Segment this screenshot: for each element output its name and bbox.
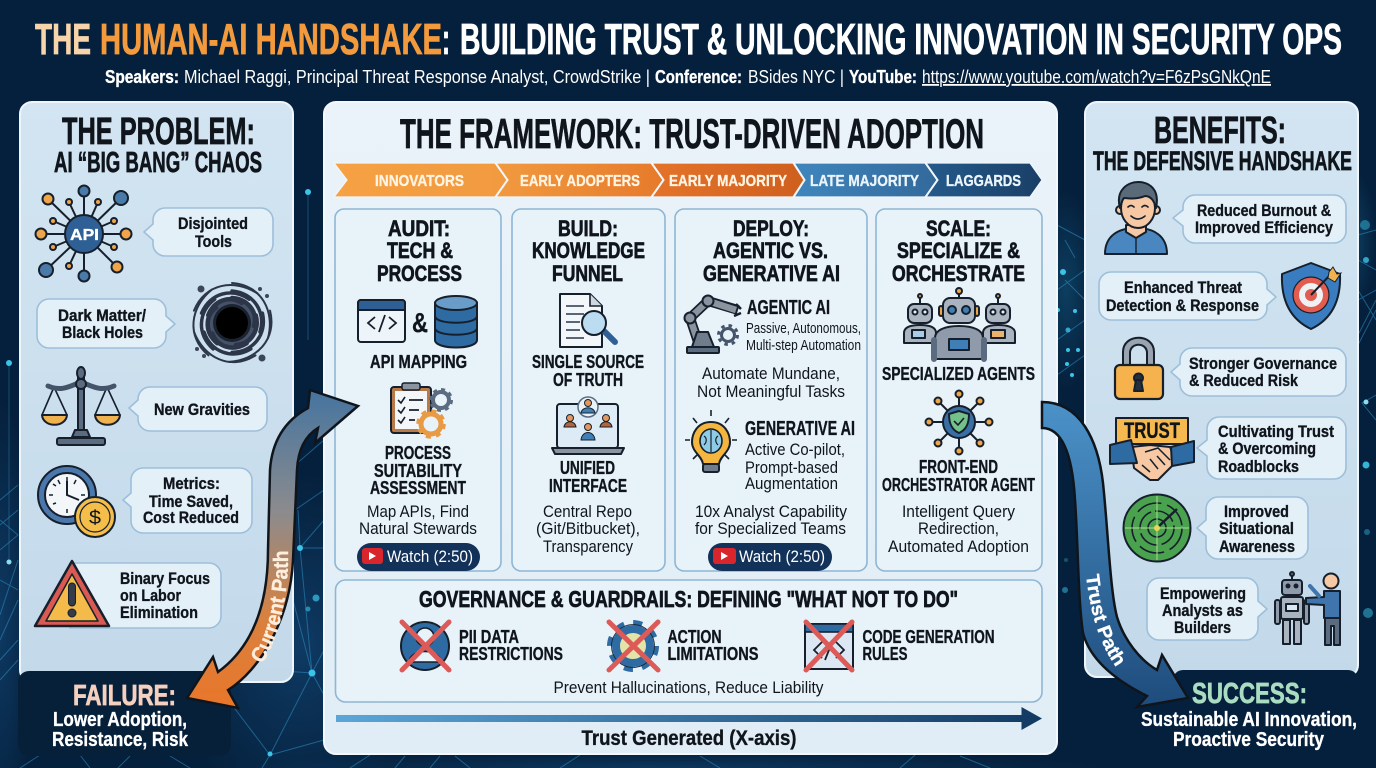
block: agentic AI: AGENTIC AI [747, 297, 830, 319]
heading: build: FUNNEL [552, 261, 623, 286]
text: audit summary [359, 502, 477, 538]
callout: cultivating trust: Cultivating Trust [1218, 422, 1334, 441]
callout: metrics [123, 468, 252, 533]
callout: threat detection: Enhanced Threat [1124, 278, 1242, 297]
callout: reduced burnout [1173, 195, 1346, 243]
heading: the framework: THE FRAMEWORK: TRUST-DRIVEN ADOPTION [400, 110, 984, 157]
label: PII data restrictions: RESTRICTIONS [459, 644, 563, 664]
text: scale summary: Redirection, [918, 519, 999, 538]
button: watch video [708, 543, 832, 571]
icon: clock and coin: $ [89, 508, 101, 529]
block: generative AI: 10x Analyst Capability [695, 502, 847, 521]
callout: situational awareness: Improved [1224, 502, 1289, 521]
panel: governance and guardrails [336, 580, 1042, 702]
callout: reduced burnout: Improved Efficiency [1195, 218, 1333, 237]
block: generative AI: Augmentation [745, 474, 838, 493]
text: build summary [536, 502, 640, 556]
block: agentic AI: Passive, Autonomous, [746, 320, 861, 337]
callout: cultivating trust: Roadblocks [1218, 457, 1299, 476]
icon: clock and coin [38, 466, 115, 537]
callout: metrics: Metrics: [163, 474, 220, 493]
panel: the framework [324, 102, 1057, 754]
button: watch video: Watch (2:50) [387, 547, 473, 566]
icon: document and magnifier [560, 294, 615, 347]
icon: code generation blocked [805, 622, 853, 670]
label: front-end orchestrator agent: ORCHESTRATOR AGENT [882, 475, 1035, 495]
heading: audit: PROCESS [377, 261, 462, 286]
heading: scale: SCALE: [926, 216, 991, 241]
heading: build: BUILD: [558, 216, 618, 241]
heading: audit: AUDIT: [388, 216, 450, 241]
label: code generation rules [862, 627, 994, 664]
heading: scale [892, 216, 1025, 286]
adoption curve chevrons: LATE MAJORITY [810, 173, 919, 190]
adoption curve chevrons [334, 163, 1042, 197]
label: process suitability assessment [370, 443, 466, 498]
callout: empowering analysts: Builders [1174, 618, 1231, 637]
card: build [512, 209, 665, 571]
callout: dark matter [37, 299, 175, 348]
label: specialized agents: SPECIALIZED AGENTS [882, 364, 1035, 384]
title: HUMAN-AI HANDSHAKE [100, 15, 442, 64]
label: api mapping: API MAPPING [370, 352, 467, 372]
text: build summary: Central Repo [543, 502, 632, 521]
heading: audit [377, 216, 462, 286]
callout: new gravities [129, 387, 267, 431]
callout: cultivating trust [1197, 417, 1346, 479]
callout: failure outcome: Resistance, Risk [52, 729, 189, 751]
block: generative AI [695, 418, 855, 538]
button: watch video [357, 543, 480, 571]
heading: deploy: DEPLOY: [733, 216, 809, 241]
text: governance summary: Prevent Hallucinations, Reduce Liability [554, 678, 824, 697]
label: action limitations: ACTION [668, 627, 722, 647]
callout: metrics: Cost Reduced [143, 508, 239, 527]
title: THE [35, 15, 91, 64]
adoption curve chevrons: EARLY ADOPTERS [520, 173, 640, 190]
icon: PII restricted [401, 622, 449, 670]
label: unified interface: UNIFIED [560, 458, 615, 478]
label: front-end orchestrator agent: FRONT-END [919, 457, 998, 477]
adoption curve chevrons: LAGGARDS [946, 173, 1021, 190]
block: agentic AI: Automate Mundane, [702, 364, 840, 383]
icon: warning triangle [35, 561, 109, 626]
arrow: trust path: Trust Path [1086, 574, 1124, 666]
callout: failure outcome [18, 671, 231, 756]
card: scale [876, 209, 1042, 571]
callout: empowering analysts [1147, 578, 1267, 640]
speakers and source line [105, 67, 1271, 87]
card: deploy [675, 209, 867, 571]
label: PII data restrictions: PII DATA [459, 627, 519, 647]
title [35, 15, 1342, 64]
callout: success outcome [1136, 670, 1358, 752]
callout: dark matter: Dark Matter/ [58, 306, 146, 325]
label: single source of truth [532, 352, 644, 390]
icon: code window and database [358, 296, 477, 348]
callout: new gravities: New Gravities [154, 400, 250, 419]
speakers and source line: YouTube: [849, 67, 917, 87]
title: : [442, 15, 450, 64]
text: audit summary: Map APIs, Find [367, 502, 469, 521]
label: action limitations: LIMITATIONS [668, 644, 758, 664]
callout: binary focus: Binary Focus [120, 569, 210, 588]
callout: binary focus: Elimination [120, 603, 198, 622]
speakers and source line: Conference: [655, 67, 742, 87]
card: audit [335, 209, 501, 571]
icon: clipboard and gears [391, 383, 452, 437]
label: front-end orchestrator agent [882, 457, 1035, 495]
heading: deploy [703, 216, 840, 286]
label: code generation rules: CODE GENERATION [862, 627, 994, 647]
heading: deploy: GENERATIVE AI [703, 261, 840, 286]
speakers and source line: Speakers: [105, 67, 179, 87]
heading: deploy: AGENTIC VS. [713, 238, 828, 263]
callout: empowering analysts: Empowering [1160, 584, 1246, 603]
heading: benefits: BENEFITS: [1154, 110, 1286, 152]
heading: the problem: THE PROBLEM: [62, 111, 255, 153]
label: process suitability assessment: ASSESSMENT [370, 478, 466, 498]
text: scale summary: Automated Adoption [888, 537, 1029, 556]
callout: situational awareness: Situational [1219, 519, 1294, 538]
callout: disjointed tools: Disjointed [178, 214, 248, 233]
label: unified interface: INTERFACE [549, 476, 627, 496]
callout: disjointed tools: Tools [195, 232, 232, 251]
block: generative AI: Active Co-pilot, [745, 440, 845, 459]
arrow: trust axis [336, 707, 1042, 730]
icon: trust handshake: TRUST [1124, 418, 1180, 443]
label: code generation rules: RULES [862, 644, 908, 664]
text: build summary: (Git/Bitbucket), [536, 519, 640, 538]
callout: stronger governance: & Reduced Risk [1189, 371, 1298, 390]
adoption curve chevrons: EARLY MAJORITY [669, 173, 787, 190]
icon: padlock [1115, 338, 1163, 399]
block: generative AI: for Specialized Teams [695, 519, 846, 538]
block: agentic AI: Not Meaningful Tasks [697, 382, 845, 401]
text: scale summary [888, 502, 1029, 556]
button: watch video: Watch (2:50) [739, 547, 825, 566]
block: agentic AI: Multi-step Automation [746, 337, 861, 354]
callout: stronger governance: Stronger Governance [1189, 354, 1337, 373]
label: trust generated: Trust Generated (X-axis) [582, 727, 796, 750]
arrow: current path: Current Path [252, 552, 288, 662]
label: PII data restrictions [459, 627, 563, 664]
speakers and source line: Michael Raggi, Principal Threat Response Analyst, CrowdStrike | [184, 67, 650, 87]
label: action limitations [668, 627, 758, 664]
label: single source of truth: SINGLE SOURCE [532, 352, 644, 372]
callout: cultivating trust: & Overcoming [1218, 439, 1316, 458]
icon: laptop with team [552, 397, 624, 454]
callout: threat detection [1099, 272, 1276, 320]
text: build summary: Transparency [543, 537, 633, 556]
icon: orchestrator hub [926, 390, 992, 454]
icon: scales [42, 367, 120, 445]
callout: empowering analysts: Analysts as [1162, 601, 1243, 620]
icon: API hub [36, 186, 132, 282]
label: process suitability assessment: SUITABILITY [374, 461, 462, 481]
speakers and source line: BSides NYC | [748, 67, 844, 87]
icon: brain light bulb [685, 410, 737, 472]
callout: reduced burnout: Reduced Burnout & [1197, 201, 1331, 220]
icon: analyst with robot [1275, 572, 1340, 645]
arrow: current path [185, 388, 360, 710]
heading: scale: SPECIALIZE & [897, 238, 1020, 263]
callout: failure outcome: Lower Adoption, [53, 709, 187, 731]
label: unified interface [549, 458, 627, 496]
callout: dark matter: Black Holes [62, 323, 143, 342]
block: generative AI: Prompt-based [745, 458, 838, 477]
icon: API hub: API [70, 227, 99, 244]
arrow: trust path [1040, 400, 1190, 709]
icon: three robots [904, 288, 1015, 359]
callout: disjointed tools [144, 208, 273, 256]
icon: trust handshake [1110, 418, 1194, 480]
speakers and source line: https://www.youtube.com/watch?v=F6zPsGNkQnE [922, 67, 1271, 87]
heading: build: KNOWLEDGE [532, 238, 645, 263]
text: audit summary: Natural Stewards [359, 519, 477, 538]
panel: the problem [20, 102, 293, 682]
label: single source of truth: OF TRUTH [553, 370, 623, 390]
panel: benefits [1085, 102, 1358, 677]
heading: governance: GOVERNANCE & GUARDRAILS: DEFINING "WHAT NOT TO DO" [419, 586, 958, 612]
block: agentic AI [697, 297, 861, 401]
icon: action limited [609, 622, 658, 670]
block: generative AI: GENERATIVE AI [745, 418, 855, 440]
callout: metrics: Time Saved, [149, 492, 233, 511]
icon: robot arm [684, 296, 741, 353]
icon: black hole [178, 275, 282, 378]
heading: benefits [1093, 110, 1352, 176]
label: process suitability assessment: PROCESS [385, 443, 451, 463]
callout: binary focus: on Labor [120, 586, 181, 605]
icon: code window and database: & [412, 307, 428, 338]
callout: situational awareness: Awareness [1219, 537, 1295, 556]
callout: threat detection: Detection & Response [1106, 296, 1259, 315]
icon: shield target [1282, 263, 1341, 329]
callout: failure outcome: FAILURE: [73, 680, 176, 712]
adoption curve chevrons: INNOVATORS [375, 173, 464, 190]
callout: success outcome: Proactive Security [1173, 729, 1325, 751]
icon: radar [1124, 494, 1190, 562]
icon: analyst [1105, 182, 1167, 254]
text: scale summary: Intelligent Query [902, 502, 1015, 521]
heading: audit: TECH & [387, 238, 453, 263]
heading: scale: ORCHESTRATE [892, 261, 1025, 286]
callout: success outcome: SUCCESS: [1192, 678, 1307, 710]
heading: the problem [54, 111, 262, 179]
callout: situational awareness [1197, 497, 1308, 559]
heading: build [532, 216, 645, 286]
callout: binary focus [70, 563, 221, 628]
heading: the problem: AI “BIG BANG” CHAOS [54, 147, 262, 179]
callout: stronger governance [1171, 348, 1346, 396]
